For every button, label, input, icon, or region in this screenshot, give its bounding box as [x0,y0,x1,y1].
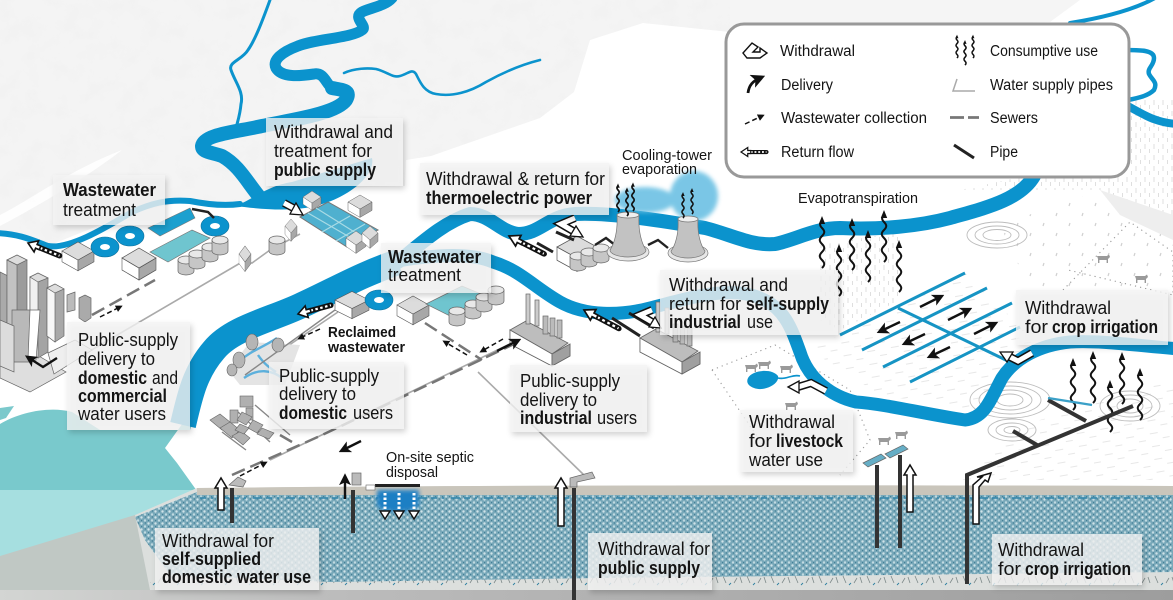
label: livestock: Withdrawal [749,412,835,432]
label: livestock: for [749,431,772,451]
legend panel: Wastewater collection [781,110,927,127]
towers [0,272,8,360]
annotation: cooling-tower evaporation: evaporation [622,161,697,178]
label: domestic and commercial delivery: Public-supply [78,330,178,350]
legend panel: Sewers [990,110,1038,127]
label: thermoelectric power: Withdrawal & return for [426,169,605,189]
label: livestock: water use [748,450,823,470]
label: domestic delivery [269,362,404,429]
label: public supply groundwater: Withdrawal for [598,539,710,559]
label: wastewater treatment left: treatment [63,200,136,220]
label: wastewater treatment center: Wastewater [388,247,481,267]
evapotranspiration wavy arrows [819,210,1143,432]
label: domestic and commercial delivery: and [152,368,178,388]
thermoelectric reach [398,176,1034,262]
legend panel: Pipe [990,144,1018,161]
label: industrial delivery [510,365,647,432]
label: withdrawal and treatment for public supply: public supply [274,160,376,180]
main upper river [275,0,392,88]
label: domestic delivery: delivery to [279,384,356,404]
irrigation pipe network [967,398,1133,584]
label: crop irrigation groundwater [992,534,1142,585]
label: withdrawal and treatment for public supply [266,118,403,186]
thermoelectric power plant [537,212,708,271]
label: wastewater treatment center: treatment [388,265,461,285]
label: self-supplied domestic: self-supplied [162,549,261,569]
label: domestic and commercial delivery: water users [77,404,166,424]
return flow arrows [26,231,621,334]
public supply treatment plant [239,191,378,272]
on-site septic system [366,484,420,519]
label: self-supplied domestic: domestic water use [162,567,311,587]
field flow arrows [881,297,994,356]
label: self-supply industrial: self-supply [746,294,829,314]
label: domestic and commercial delivery: commercial [78,386,167,406]
legend icon: water supply pipes [953,79,975,91]
legend icon: wastewater collection [745,116,762,124]
residential houses [210,396,290,450]
annotation: reclaimed wastewater [327,324,405,356]
label: crop irrigation surface: for [1025,317,1048,337]
cooling tower evaporation plumes [615,171,718,221]
center-pivot irrigation circles [967,222,1160,441]
label: self-supply industrial: use [747,312,773,332]
label: crop irrigation surface: crop irrigation [1052,317,1158,337]
withdrawal arrows [284,203,1032,393]
livestock pond and cattle [745,254,1148,445]
label: industrial delivery: industrial [520,408,592,428]
sewers [92,280,514,475]
central wastewater treatment plant [335,286,504,326]
label: thermoelectric power [420,163,609,215]
label: public supply groundwater [588,533,712,590]
aquifer [135,492,1173,582]
legend icon: consumptive use [956,35,974,65]
label: livestock: livestock [776,431,844,451]
label: domestic and commercial delivery [67,322,190,430]
label: livestock [740,410,853,472]
label: wastewater treatment left [53,175,165,225]
left wastewater treatment plant [62,208,229,280]
label: industrial delivery: delivery to [520,390,597,410]
annotation: reclaimed wastewater: Reclaimed [328,324,396,341]
annotation: on-site septic disposal: On-site septic [386,449,474,466]
legend panel [726,24,1129,177]
label: crop irrigation groundwater: for [998,559,1021,579]
legend panel: Withdrawal [780,43,855,60]
label: self-supply industrial: return for [669,294,741,314]
coastal water [0,400,200,560]
annotation: on-site septic disposal: disposal [386,464,438,481]
label: self-supply industrial: industrial [669,312,741,332]
label: domestic delivery: users [353,403,393,423]
legend panel: Consumptive use [990,43,1098,60]
label: self-supply industrial: Withdrawal and [669,275,788,295]
label: crop irrigation groundwater: crop irrigation [1025,559,1131,579]
livestock well sprinklers [863,445,908,467]
cooling tower consumptive arrows [616,182,694,218]
label: domestic delivery: Public-supply [279,366,379,386]
legend panel: Return flow [781,144,855,161]
legend icon: sewers [950,116,979,119]
annotation: cooling-tower evaporation [622,147,712,178]
industrial factories [510,294,700,374]
annotation: evapotranspiration: Evapotranspiration [798,190,918,207]
label: crop irrigation groundwater: Withdrawal [998,540,1084,560]
label: self-supply industrial [660,270,838,335]
upper tributaries [231,0,270,128]
legend icon: return flow [741,148,766,156]
irrigated parkland with reclaimed wastewater [227,310,335,385]
label: self-supplied domestic [155,528,319,590]
label: public supply groundwater: public supply [598,558,700,578]
annotation: on-site septic disposal [386,449,474,481]
wells [232,455,900,600]
lagoon at public supply intake [236,158,372,209]
label: crop irrigation surface: Withdrawal [1025,298,1111,318]
annotation: cooling-tower evaporation: Cooling-tower [622,147,712,164]
label: domestic and commercial delivery: domestic [78,368,147,388]
western river reach [0,201,240,246]
northeast reach [1122,103,1173,124]
wide river to coast [183,262,398,425]
label: industrial delivery: Public-supply [520,371,620,391]
groundwater withdrawal arrows [215,465,991,526]
river system [0,0,1173,425]
label: withdrawal and treatment for public supply: Withdrawal and [274,122,393,142]
textured upland terrain [0,0,1080,246]
legend icon: delivery [748,78,760,93]
label: domestic and commercial delivery: delivery to [78,349,155,369]
legend panel: Water supply pipes [990,77,1113,94]
label: withdrawal and treatment for public supply: treatment for [274,141,372,161]
delivery and wastewater collection arrows [29,307,517,476]
subsurface layers [0,485,1173,600]
city of domestic and commercial users [0,255,92,392]
label: thermoelectric power: thermoelectric power [426,188,592,208]
label: self-supplied domestic: Withdrawal for [162,531,274,551]
legend icon: pipe [954,145,974,158]
label: industrial delivery: users [597,408,637,428]
farm fields and pasture [712,100,1173,480]
label: crop irrigation surface [1016,290,1168,345]
label: wastewater treatment left: Wastewater [63,180,156,200]
annotation: reclaimed wastewater: wastewater [327,339,405,356]
label: domestic delivery: domestic [279,403,347,423]
irrigation canals [840,273,1020,382]
legend panel: Delivery [781,77,833,94]
cooling towers [607,212,708,262]
legend icon: withdrawal [743,43,767,58]
wellheads [229,472,595,487]
water supply pipes [66,234,585,476]
label: wastewater treatment center [381,243,491,293]
